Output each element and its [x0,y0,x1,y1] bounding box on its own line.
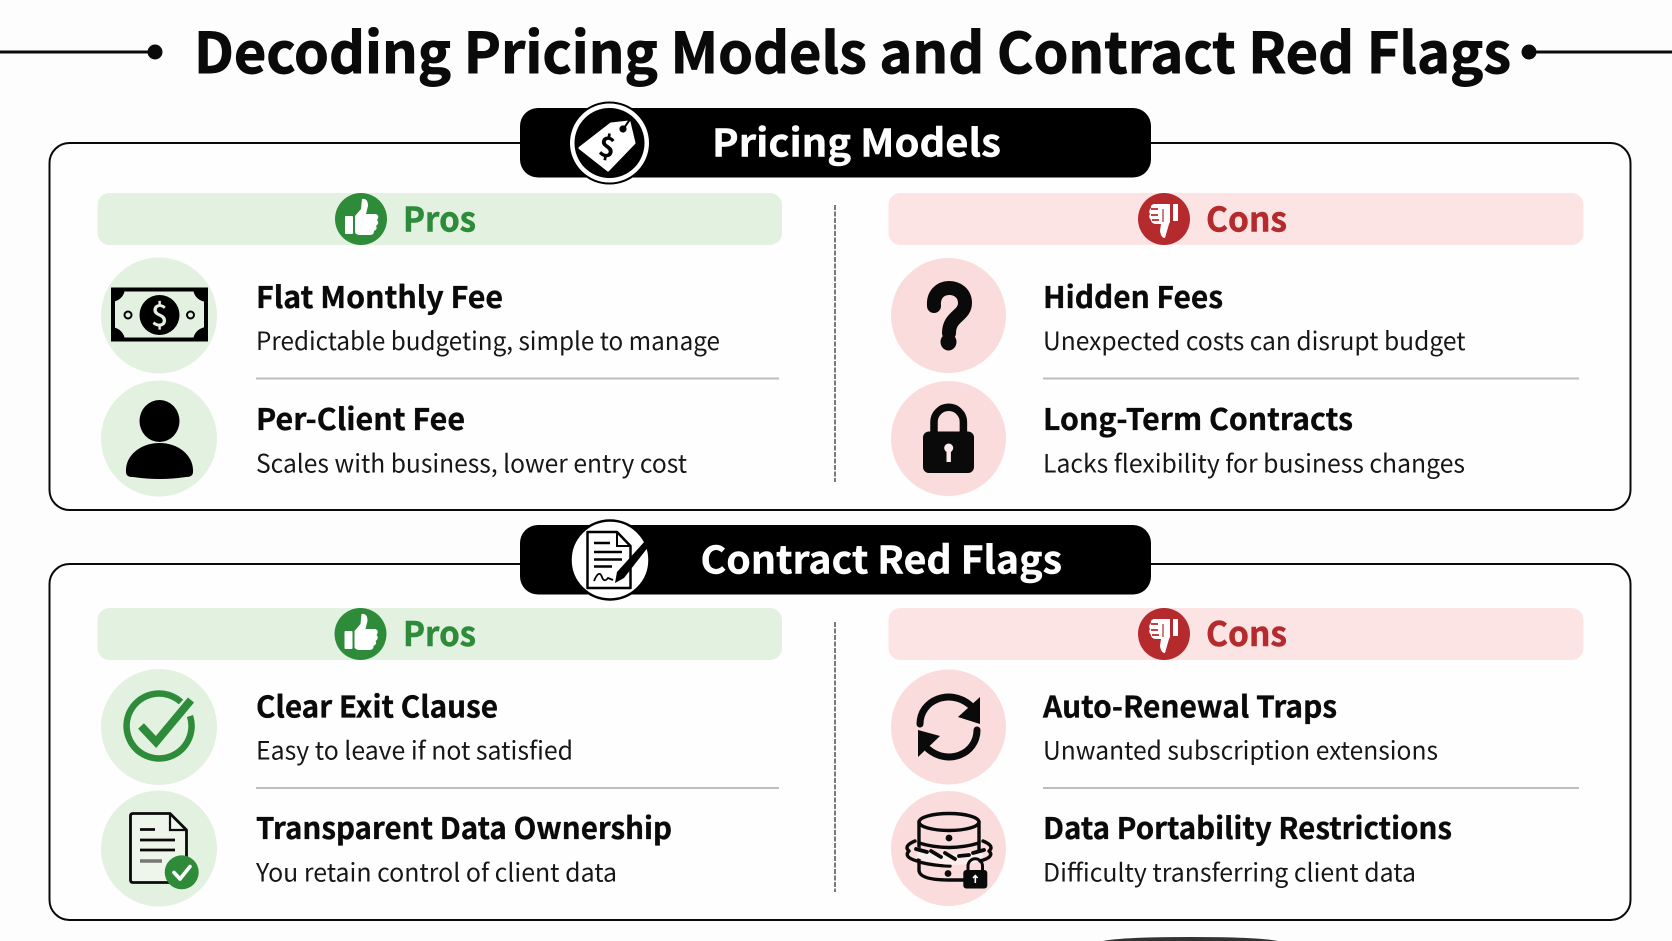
item: long-term contracts [891,381,1465,496]
item: hidden fees: Unexpected costs can disrupt budget [1043,322,1466,358]
item: flat monthly fee: Predictable budgeting, simple to manage [256,322,720,358]
item: hidden fees: Hidden Fees [1043,273,1223,317]
section header: contract red flags: Contract Red Flags [700,530,1062,584]
item: auto-renewal traps: Unwanted subscription extensions [1043,732,1438,768]
item: clear exit clause: Easy to leave if not satisfied [256,732,573,768]
item: per-client fee: Scales with business, lower entry cost [256,444,688,480]
item: data portability restrictions: Difficulty transferring client data [1043,854,1416,890]
cons header: Cons [1206,607,1287,656]
title: Decoding Pricing Models and Contract Red Flags [194,9,1511,90]
icon: padlock [923,407,974,473]
icon: person [126,400,193,479]
panel: pricing models [50,102,1630,510]
icon: check circle [127,693,192,758]
item: transparent data ownership: Transparent Data Ownership [256,804,672,848]
cons header [888,192,1584,245]
icon: question mark [934,288,965,350]
icon: banknote: $ [151,291,168,335]
section header: contract red flags [520,520,1151,600]
item: data portability restrictions [891,791,1452,906]
item: per-client fee: Per-Client Fee [256,395,465,439]
icon: price tag: $ [596,125,619,167]
item: flat monthly fee [101,258,720,374]
icon: banknote [111,288,207,341]
cons header [888,607,1584,660]
item: auto-renewal traps [891,670,1438,784]
cons header: Cons [1206,192,1287,242]
section header: pricing models [520,102,1151,184]
item: data portability restrictions: Data Portability Restrictions [1043,804,1452,848]
item: clear exit clause: Clear Exit Clause [256,682,498,726]
item: per-client fee [101,380,688,496]
item: long-term contracts: Lacks flexibility for business changes [1043,444,1465,480]
icon: price tag [569,102,650,184]
icon: document with check [130,814,199,889]
item: auto-renewal traps: Auto-Renewal Traps [1042,682,1337,726]
item: long-term contracts: Long-Term Contracts [1043,395,1353,439]
pros header: Pros [403,192,476,242]
item: hidden fees [891,258,1466,373]
pros header [98,192,782,245]
item: transparent data ownership: You retain control of client data [255,854,617,890]
section header: pricing models: Pricing Models [712,112,1001,168]
item: flat monthly fee: Flat Monthly Fee [256,273,503,317]
panel: contract red flags [50,520,1630,920]
pros header: Pros [403,607,476,656]
icon: chained database with lock [907,814,991,888]
item: clear exit clause [101,669,573,785]
icon: signed contract [570,520,650,600]
item: transparent data ownership [101,790,672,906]
pros header [98,607,782,660]
icon: renewal arrows [918,697,980,757]
